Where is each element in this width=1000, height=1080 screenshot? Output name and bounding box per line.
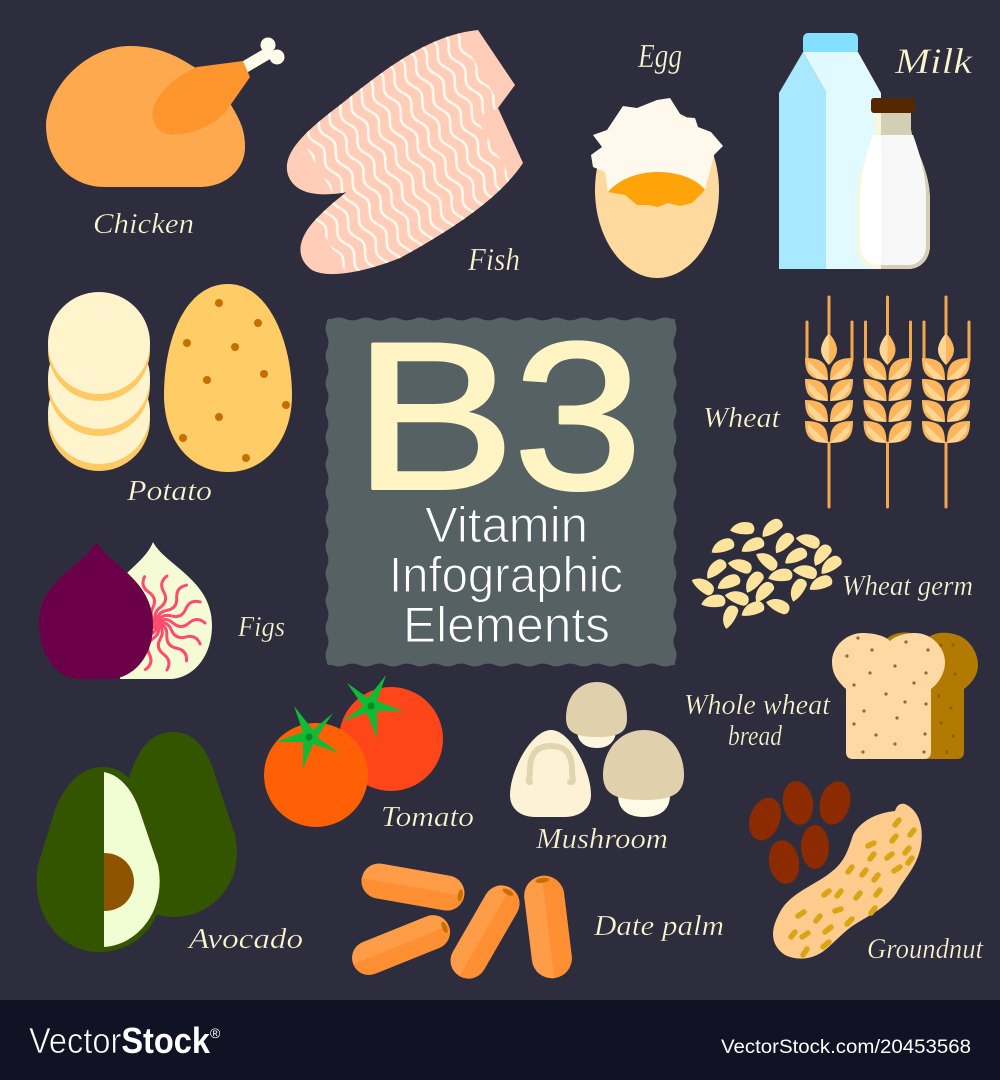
icon: whole wheat bread [832, 632, 978, 759]
label: Wheat: Wheat [703, 402, 781, 434]
egg yolk [608, 172, 705, 207]
heading: B3: 3 [513, 299, 643, 534]
icon: tomatoes [264, 675, 443, 827]
chicken leg [152, 61, 250, 135]
icon: chicken [46, 38, 284, 187]
icon: figs [39, 542, 212, 679]
icon: wheat stalks [805, 297, 970, 507]
icon: whole potato [164, 284, 292, 472]
label: Avocado: Avocado [187, 923, 303, 955]
icon: wheat germ seeds [690, 516, 844, 631]
icon: fish fillets [286, 30, 523, 274]
icon: groundnut shell [773, 804, 922, 959]
label: Egg: Egg [637, 38, 682, 75]
label: Figs: Figs [237, 611, 285, 643]
label: Mushroom: Mushroom [535, 823, 668, 855]
icon: groundnut kernels [743, 778, 855, 886]
text: Vitamin Infographic Elements: Vitamin [425, 497, 588, 553]
label: Whole wheat bread [684, 689, 831, 752]
footer image id: VectorStock.com/20453568 [721, 1037, 971, 1058]
label: Tomato: Tomato [381, 801, 474, 833]
label: Potato: Potato [126, 475, 212, 507]
text: Vitamin Infographic Elements [389, 497, 623, 653]
label: Chicken: Chicken [93, 208, 194, 240]
icon: avocados [37, 732, 237, 952]
chicken bone [243, 38, 284, 68]
heading: B3: B [353, 299, 515, 534]
icon: date palm fruits [347, 861, 574, 985]
text: Vitamin Infographic Elements: Infographic [389, 547, 623, 603]
footer logo: VectorStock: VectorStock [29, 1020, 211, 1061]
footer bar [0, 1000, 1000, 1080]
label: Date palm: Date palm [593, 910, 724, 942]
heading: B3 [353, 299, 643, 534]
text: Vitamin Infographic Elements: Elements [403, 597, 610, 653]
icon: potato slices [48, 292, 150, 471]
footer logo registered mark: ® [210, 1025, 221, 1041]
icon: milk carton and bottle [779, 33, 930, 269]
egg white [591, 98, 723, 192]
label: Fish: Fish [467, 241, 520, 277]
label: Groundnut: Groundnut [867, 933, 984, 965]
label: Whole wheat bread: bread [728, 720, 782, 752]
label: Whole wheat bread: Whole wheat [684, 689, 831, 721]
label: Wheat germ: Wheat germ [842, 570, 973, 602]
milk bottle [857, 98, 930, 269]
icon: egg [591, 98, 723, 278]
label: Milk: Milk [894, 41, 973, 81]
panel: B3 title card [326, 299, 676, 666]
icon: mushrooms [510, 682, 684, 817]
